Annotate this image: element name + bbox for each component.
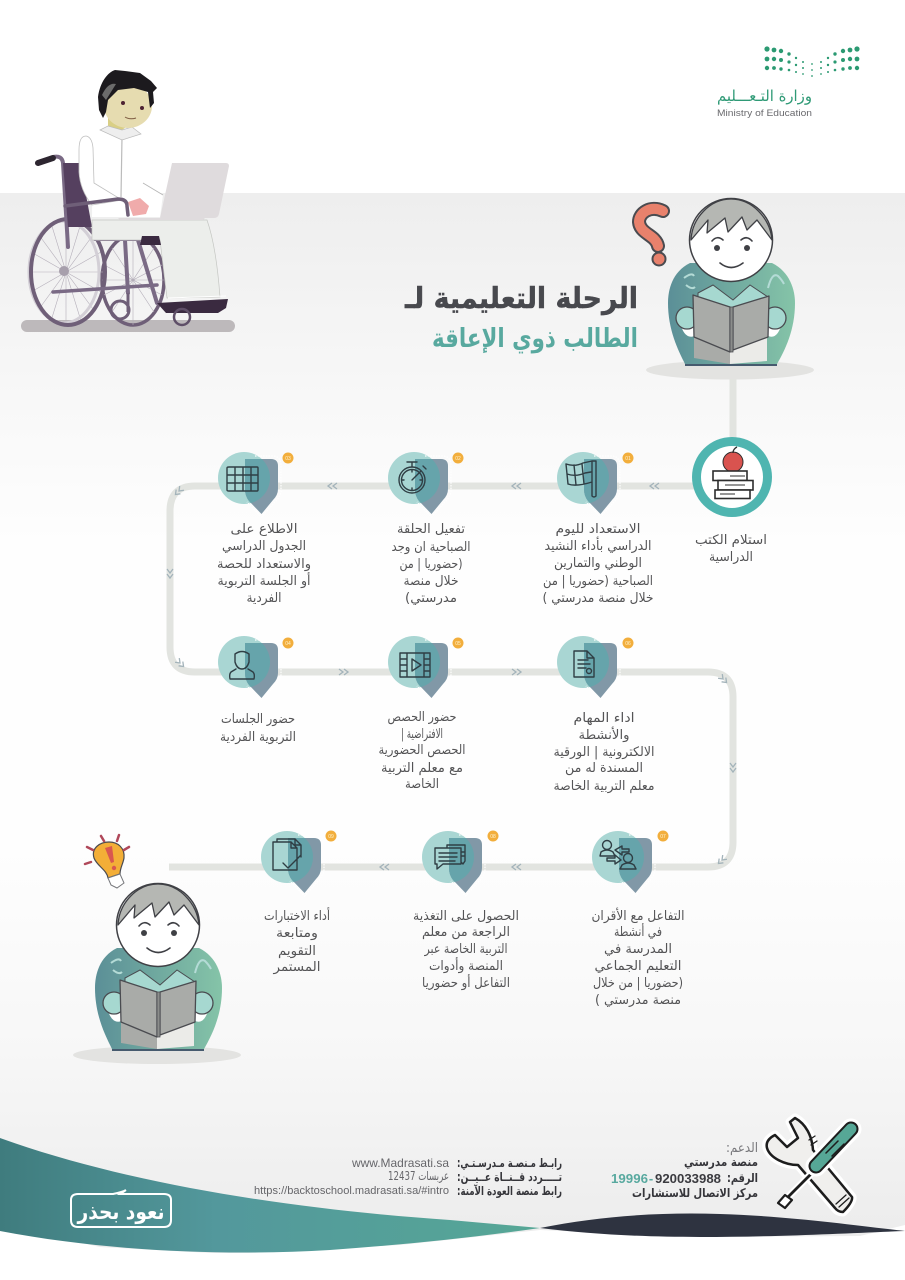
text: المستمر <box>272 960 320 975</box>
pin with document icon <box>557 636 620 701</box>
pin with exam check icon <box>261 831 324 896</box>
text: المنصة وأدوات <box>429 957 503 974</box>
journey path <box>167 378 736 870</box>
laptop <box>118 163 229 220</box>
label: الدراسية <box>709 550 753 565</box>
text: (حضوريا | من خلال <box>593 976 683 991</box>
text: أو الجلسة التربوية <box>218 572 310 589</box>
badge <box>452 638 464 648</box>
pin with flag icon <box>557 452 620 517</box>
handle <box>38 158 53 163</box>
step 09 <box>261 830 336 975</box>
text: الدراسي بأداء النشيد <box>544 536 652 554</box>
text: التفاعل مع الأقران <box>592 907 684 924</box>
step 06 <box>554 636 654 794</box>
text: مع معلم التربية <box>381 761 463 776</box>
link labels: تـــــردد قــنــاة عــيــن: <box>457 1170 562 1184</box>
support block: 920033988 <box>655 1171 721 1186</box>
link labels <box>457 1156 562 1199</box>
text: الاستعداد لليوم <box>556 522 640 537</box>
bottom wave: dark <box>540 1214 905 1237</box>
person legs <box>92 220 220 298</box>
armrest <box>65 199 128 215</box>
badge <box>488 830 498 842</box>
text <box>220 712 296 745</box>
logo english name: Ministry of Education <box>717 108 812 119</box>
ground shadow <box>21 320 235 332</box>
text <box>264 907 330 975</box>
text: خلال منصة <box>404 574 458 589</box>
badge: 02 <box>455 456 461 462</box>
title line 2: الطالب ذوي الإعاقة <box>432 324 638 354</box>
hand <box>128 198 149 216</box>
backrest <box>63 163 92 227</box>
arrows <box>167 483 736 870</box>
badge: 07 <box>660 834 666 840</box>
text: الوطني والتمارين <box>554 556 642 571</box>
back to school logo: نعود بحذر <box>77 1200 164 1224</box>
text <box>392 522 470 606</box>
text <box>592 907 684 1008</box>
person arm <box>79 136 122 205</box>
text: الصباحية (حضوريا | من <box>543 574 653 589</box>
link values: https://backtoschool.madrasati.sa/#intro <box>254 1185 449 1197</box>
text <box>554 711 654 794</box>
step 02 <box>388 452 470 606</box>
text: منصة مدرستي ) <box>595 993 681 1008</box>
support block <box>611 1141 758 1200</box>
step 04 <box>218 636 296 745</box>
text <box>542 522 654 606</box>
step 05 <box>378 636 466 792</box>
illustration: student in wheelchair <box>21 70 235 332</box>
icon: apple and books <box>692 437 772 517</box>
pin with person icon <box>218 636 281 701</box>
badge <box>326 830 336 842</box>
text: تفعيل الحلقة <box>397 522 465 537</box>
text: التعليم الجماعي <box>594 959 682 974</box>
step 08 <box>413 830 519 991</box>
badge: 05 <box>455 641 461 647</box>
support block: - <box>649 1171 653 1186</box>
label: استلام الكتب <box>695 533 767 548</box>
badge <box>622 452 634 464</box>
badge: 03 <box>285 456 291 462</box>
pin with video icon <box>388 636 451 701</box>
text: التقويم <box>278 944 316 959</box>
pin with timetable icon <box>218 452 281 517</box>
label <box>695 533 767 565</box>
icon: tools <box>767 1118 852 1212</box>
badge: 06 <box>625 641 631 647</box>
step 07 <box>592 830 684 1008</box>
title <box>404 281 638 354</box>
neck and collar <box>108 118 125 132</box>
ministry logo <box>717 46 860 119</box>
link values: www.Madrasati.sa <box>351 1156 449 1170</box>
pin with chat icon <box>422 831 485 896</box>
person torso <box>92 137 163 217</box>
link labels: رابـط مـنصـة مـدرسـتـي: <box>457 1156 562 1170</box>
text: التربوية الفردية <box>220 730 296 745</box>
back to school logo <box>71 1190 171 1227</box>
text <box>378 710 466 792</box>
support block: منصة مدرستي <box>684 1155 758 1169</box>
foot rest <box>157 299 228 313</box>
text: الالكترونية | الورقية <box>554 745 654 760</box>
badge <box>622 638 634 648</box>
wrench <box>767 1118 852 1212</box>
text: والاستعداد للحصة <box>217 557 311 572</box>
text: ومتابعة <box>276 926 318 941</box>
student reading, top <box>646 198 814 380</box>
support block: الرقم: <box>727 1171 758 1185</box>
support block: 19996 <box>611 1171 648 1186</box>
text: (حضوريا | من <box>400 557 462 572</box>
screwdriver <box>778 1129 851 1208</box>
support block: مركز الاتصال للاستشارات <box>632 1186 758 1200</box>
icon: question mark <box>639 209 666 266</box>
badge <box>658 830 668 842</box>
text <box>217 522 311 606</box>
icon: light bulb <box>85 835 129 888</box>
text: مدرستي) <box>405 591 457 606</box>
text: الحصول على التغذية <box>413 909 519 924</box>
hair <box>98 70 157 118</box>
front big wheel <box>28 218 105 326</box>
step 03 <box>217 452 311 606</box>
badge: 01 <box>625 456 631 462</box>
text: حضور الحصص <box>388 710 456 725</box>
logo dots <box>764 46 860 77</box>
text: التفاعل أو حضوريا <box>422 974 510 991</box>
links block <box>254 1156 562 1199</box>
badge: 04 <box>285 641 291 647</box>
text: حضور الجلسات <box>221 712 295 727</box>
link values: عربسات 12437 <box>388 1169 449 1184</box>
text: المدرسة في <box>604 942 672 957</box>
logo arabic name: وزارة التـعـــليم <box>717 87 812 105</box>
text: في أنشطة <box>614 923 662 940</box>
start step: receiving books <box>692 437 772 565</box>
text: المسندة له من <box>565 761 643 776</box>
text: الفردية <box>246 591 282 606</box>
chair frame <box>38 157 157 303</box>
text: والأنشطة <box>578 726 630 743</box>
step 01 <box>542 452 654 606</box>
text: معلم التربية الخاصة <box>554 779 654 794</box>
text: الصباحية ان وجد <box>392 540 470 555</box>
badge: 09 <box>328 834 334 840</box>
support block: الدعم: <box>726 1141 758 1156</box>
badge <box>452 452 464 464</box>
text: اداء المهام <box>574 711 634 726</box>
text: الجدول الدراسي <box>222 539 306 554</box>
pin with stopwatch icon <box>388 452 451 517</box>
badge <box>282 452 294 464</box>
text: خلال منصة مدرستي ) <box>542 591 654 606</box>
text: الخاصة <box>405 777 439 792</box>
text: الراجعة من معلم <box>422 925 510 940</box>
text: الحصص الحضورية <box>378 743 466 758</box>
rear wheel <box>102 235 164 325</box>
text: الاطلاع على <box>230 522 298 537</box>
pin with peers icon <box>592 831 655 896</box>
text: أداء الاختبارات <box>264 907 330 924</box>
bottom wave: teal <box>0 1138 540 1253</box>
link labels: رابط منصة العودة الآمنة: <box>457 1184 562 1199</box>
link values <box>254 1156 449 1197</box>
text: التربية الخاصة عبر <box>424 942 508 957</box>
face <box>104 84 152 128</box>
student reading, bottom <box>73 884 241 1064</box>
text <box>413 909 519 991</box>
title line 1: الرحلة التعليمية لـ <box>404 281 638 315</box>
text: الافتراضية | <box>401 727 443 742</box>
badge: 08 <box>490 834 496 840</box>
